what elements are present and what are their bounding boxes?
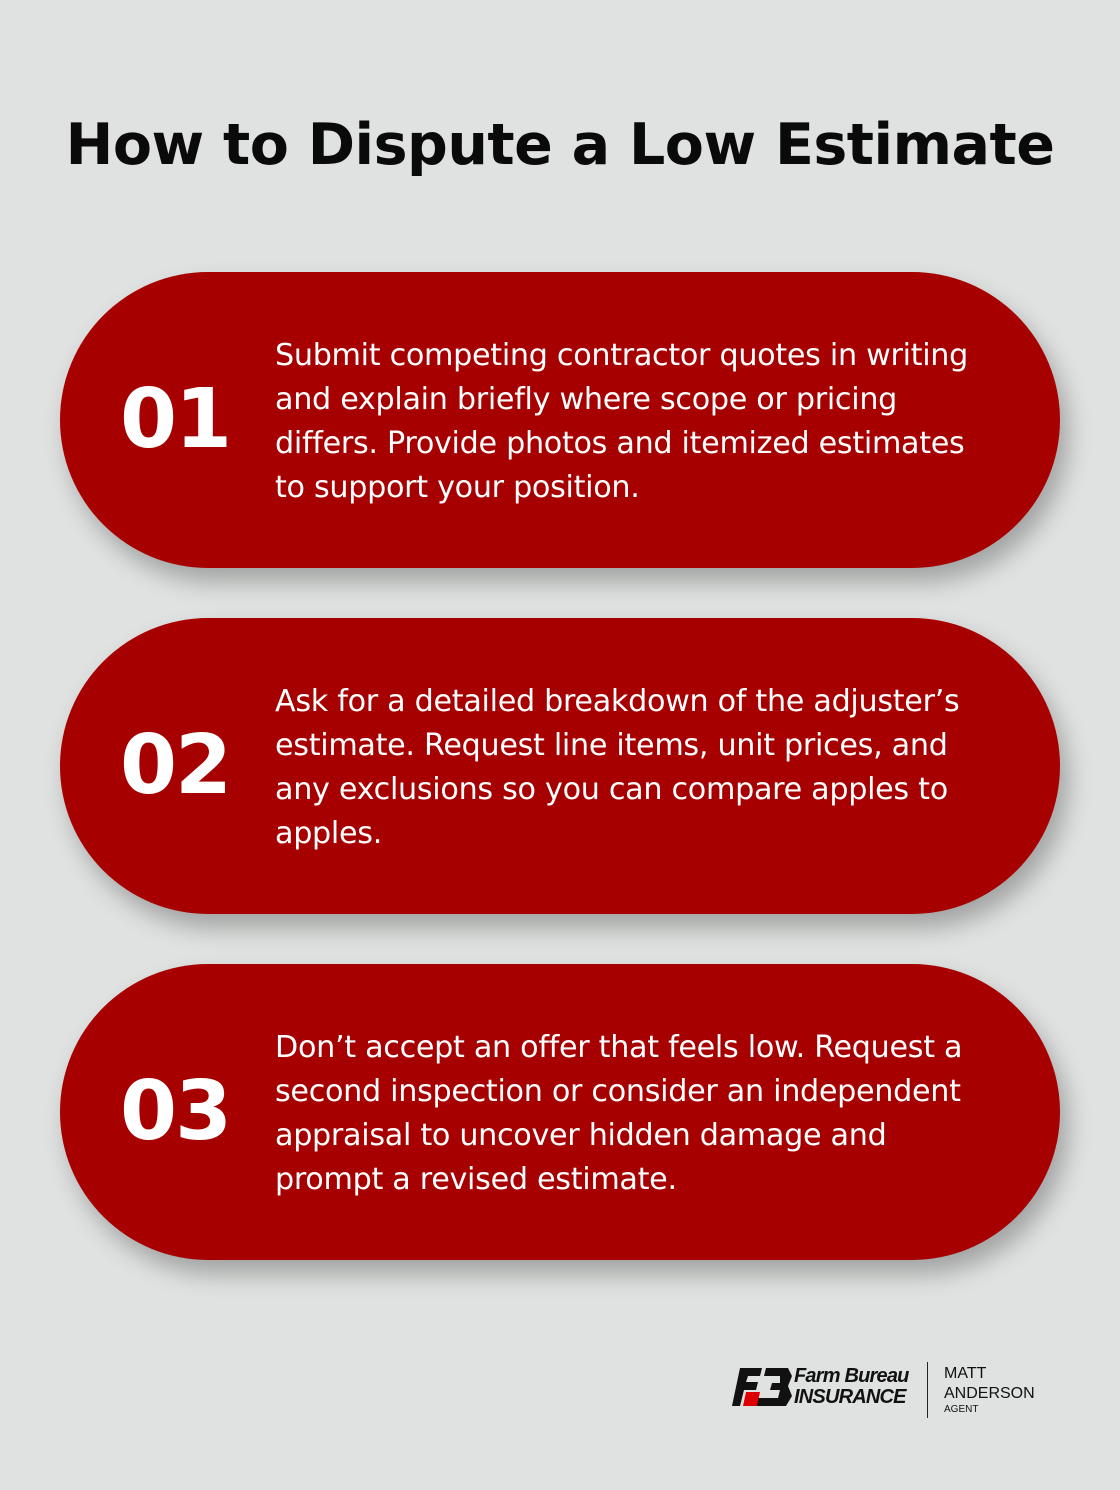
brand text: INSURANCE (794, 1386, 906, 1408)
panel: step 1 (60, 272, 1060, 568)
panel: step 2 (60, 618, 1060, 914)
brand text (794, 1365, 909, 1408)
agent name (944, 1365, 1035, 1415)
logo (732, 1362, 1035, 1418)
panel: step 3 (60, 964, 1060, 1260)
agent name: AGENT (944, 1404, 978, 1415)
agent name: MATT (944, 1365, 986, 1382)
agent name: ANDERSON (944, 1385, 1035, 1402)
brand text: Farm Bureau (794, 1365, 909, 1387)
title: How to Dispute a Low Estimate (66, 112, 1054, 178)
number 03: 03 (120, 1064, 230, 1159)
number 01: 01 (120, 372, 230, 467)
icon: FB mark (732, 1368, 792, 1406)
text step 3: Don’t accept an offer that feels low. Request a second inspection or consider an independent appraisal to uncover hidden damage and prompt a revised estimate. (275, 1030, 962, 1197)
text step 1: Submit competing contractor quotes in writing and explain briefly where scope or pricing differs. Provide photos and itemized estimates to support your position. (275, 338, 968, 505)
text step 2: Ask for a detailed breakdown of the adjuster’s estimate. Request line items, unit prices, and any exclusions so you can compare apples to apples. (275, 684, 959, 851)
number 02: 02 (120, 718, 230, 813)
